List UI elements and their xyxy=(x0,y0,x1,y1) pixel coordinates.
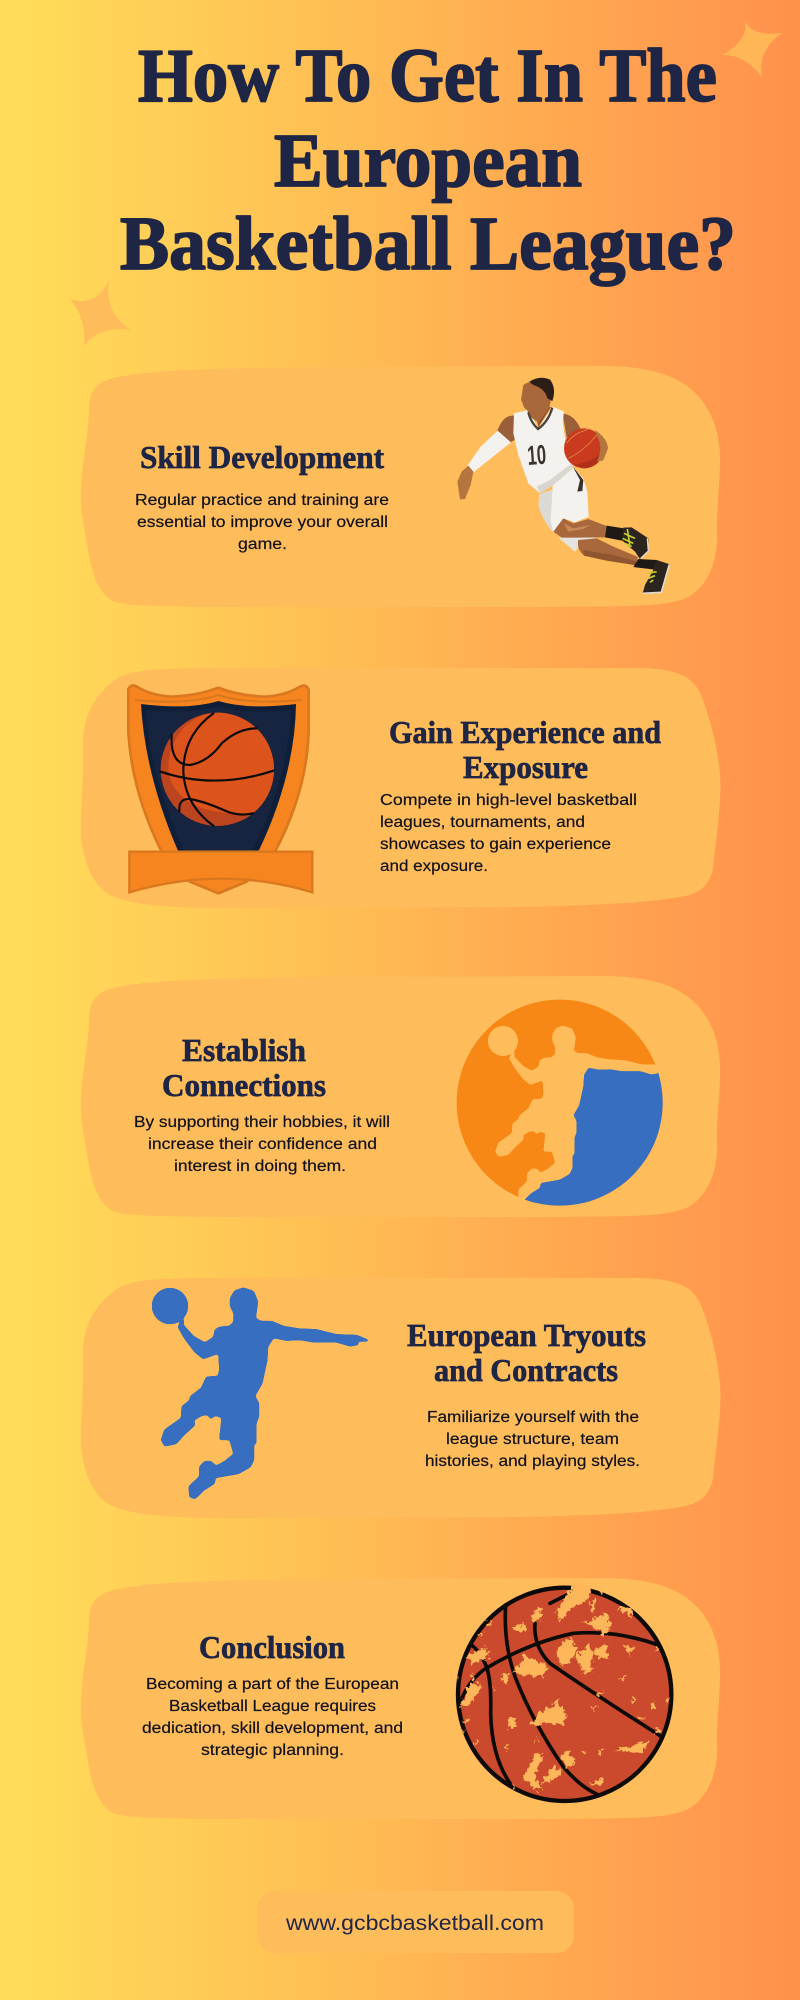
decorative star: left xyxy=(70,279,131,346)
body text: conclusion: Becoming a part of the European xyxy=(146,1676,399,1693)
illustration: dribbling basketball player: 10 xyxy=(526,439,547,471)
body text: gain experience and exposure xyxy=(380,792,637,875)
panel 5 background xyxy=(81,1578,720,1819)
footer website pill xyxy=(257,1891,574,1953)
heading: skill development: Skill Development xyxy=(140,439,384,475)
panel 3 background xyxy=(81,976,720,1217)
heading: european tryouts and contracts: and Contracts xyxy=(434,1352,618,1388)
title: How To Get In The xyxy=(138,34,717,118)
panel 4 background xyxy=(81,1278,720,1518)
body text: skill development: essential to improve your overall xyxy=(137,514,388,531)
heading: gain experience and exposure: Exposure xyxy=(463,749,588,785)
body text: conclusion: strategic planning. xyxy=(201,1742,344,1759)
illustration: distressed basketball xyxy=(455,1581,671,1801)
panel 2 background xyxy=(81,668,720,908)
panel: skill development xyxy=(81,366,720,607)
decorative star: top right xyxy=(723,19,783,77)
illustration: dribbling basketball player xyxy=(457,378,670,593)
body text: gain experience and exposure: Compete in high-level basketball xyxy=(380,792,637,809)
heading: european tryouts and contracts xyxy=(407,1317,646,1388)
heading: conclusion: Conclusion xyxy=(199,1629,345,1665)
panel 1 background xyxy=(81,366,720,607)
body text: european tryouts and contracts: league structure, team xyxy=(446,1431,619,1448)
panel: conclusion xyxy=(81,1578,720,1819)
illustration: blue player silhouette xyxy=(153,1288,368,1498)
illustration: basketball shield badge xyxy=(128,685,312,893)
title: Basketball League? xyxy=(120,202,736,286)
body text: european tryouts and contracts: Familiarize yourself with the xyxy=(427,1409,639,1426)
body text: european tryouts and contracts xyxy=(425,1409,640,1470)
panel: gain experience and exposure xyxy=(81,668,720,908)
heading: establish connections: Connections xyxy=(162,1067,326,1103)
body text: conclusion: dedication, skill development, and xyxy=(142,1720,403,1737)
title: European xyxy=(274,119,582,203)
body text: establish connections: increase their confidence and xyxy=(148,1136,377,1153)
body text: establish connections xyxy=(134,1114,390,1175)
heading: gain experience and exposure xyxy=(389,714,661,785)
body text: skill development: Regular practice and training are xyxy=(135,492,389,509)
heading: establish connections: Establish xyxy=(182,1032,306,1068)
panel: european tryouts and contracts xyxy=(81,1278,720,1518)
panel: establish connections xyxy=(81,976,720,1217)
body text: gain experience and exposure: showcases to gain experience xyxy=(380,836,611,853)
footer website pill: www.gcbcbasketball.com xyxy=(285,1912,544,1935)
body text: gain experience and exposure: leagues, tournaments, and xyxy=(380,814,585,831)
title xyxy=(120,34,736,286)
heading: establish connections xyxy=(162,1032,326,1103)
body text: establish connections: By supporting their hobbies, it will xyxy=(134,1114,390,1131)
body text: skill development xyxy=(135,492,389,553)
illustration: two-tone circle with player silhouette xyxy=(456,1000,663,1206)
body text: gain experience and exposure: and exposure. xyxy=(380,858,488,875)
body text: establish connections: interest in doing them. xyxy=(174,1158,346,1175)
body text: conclusion: Basketball League requires xyxy=(169,1698,376,1715)
body text: conclusion xyxy=(142,1676,403,1759)
body text: skill development: game. xyxy=(238,536,287,553)
heading: european tryouts and contracts: European Tryouts xyxy=(407,1317,646,1353)
heading: gain experience and exposure: Gain Experience and xyxy=(389,714,661,750)
body text: european tryouts and contracts: histories, and playing styles. xyxy=(425,1453,640,1470)
